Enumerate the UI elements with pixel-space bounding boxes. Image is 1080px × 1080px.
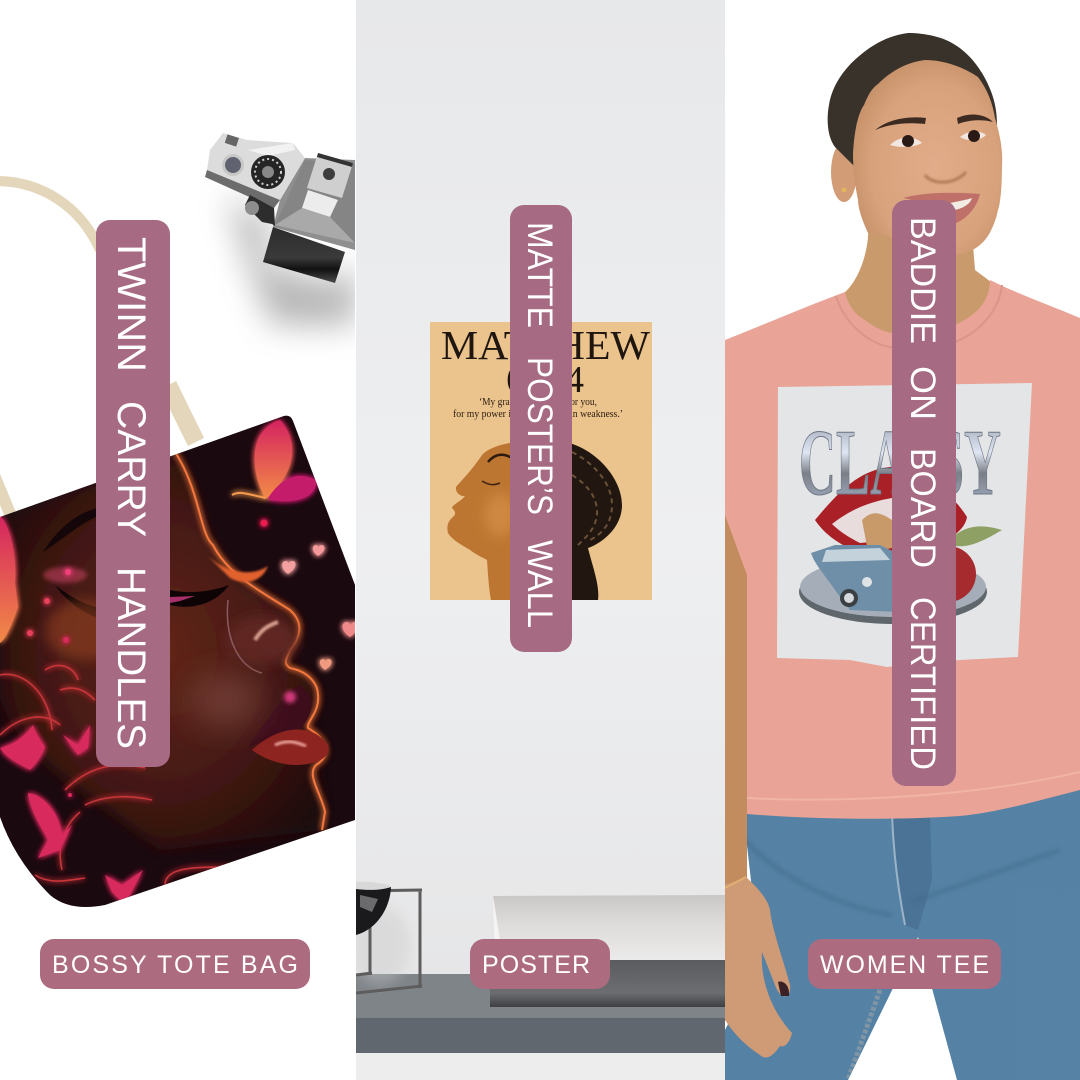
icon: camera <box>205 133 356 325</box>
mouth <box>903 193 980 226</box>
pill: baddie on board certified: BOARD <box>903 448 942 568</box>
shelf with books and decor <box>350 882 725 1080</box>
print: cherry and leaf <box>956 526 1002 601</box>
pill: baddie on board certified: ON <box>903 366 942 420</box>
brows <box>875 115 993 130</box>
print: lips <box>815 467 967 553</box>
pill: twinn carry handles: HANDLES <box>109 567 153 749</box>
hair <box>828 33 997 165</box>
pill: matte poster's wall <box>510 205 572 652</box>
poster artwork <box>430 322 652 600</box>
label: poster: POSTER <box>482 951 590 979</box>
tote bag artwork <box>0 410 358 920</box>
ear <box>831 148 856 202</box>
poster: quote <box>453 397 623 420</box>
poster: quote: ‘My grace is sufficient for you, <box>479 397 597 408</box>
pill: baddie on board certified: CERTIFIED <box>903 597 942 770</box>
tote: left butterfly and sparkles <box>0 515 358 670</box>
pill: twinn carry handles <box>96 220 170 767</box>
panel: tote bag <box>0 133 355 907</box>
label: women tee <box>808 939 1001 989</box>
tote: swirl vines <box>0 665 240 885</box>
pill: matte poster's wall: WALL <box>520 540 559 628</box>
tee print <box>777 383 1032 667</box>
pill: baddie on board certified <box>892 200 956 786</box>
tote: eyebrow and eye <box>43 508 268 660</box>
pill: matte poster's wall: MATTE <box>520 222 559 328</box>
print: classic car <box>811 545 892 612</box>
pill: baddie on board certified: BADDIE <box>903 217 942 344</box>
model head <box>828 33 1002 255</box>
pink t-shirt <box>725 280 1080 819</box>
earring <box>842 188 846 192</box>
tote: neon contour <box>175 452 326 830</box>
label: women tee: WOMEN TEE <box>820 951 989 979</box>
neck <box>845 233 990 333</box>
tote: small butterflies <box>0 637 143 902</box>
icon: tote handles <box>0 181 196 516</box>
metal frame and bowl <box>350 882 422 993</box>
panel: poster on wall <box>350 0 725 1080</box>
label: bossy tote bag <box>40 939 310 989</box>
nose <box>925 172 966 182</box>
pill: matte poster's wall: POSTER’S <box>520 357 559 515</box>
jeans <box>725 785 1080 1080</box>
arm and hand <box>725 500 792 1058</box>
tote: top butterfly <box>232 420 316 501</box>
print: platform <box>799 568 987 624</box>
poster: title: MATTHEW <box>441 322 650 368</box>
tote: face skin <box>0 452 326 850</box>
poster: verse number: 6:14 <box>506 359 584 401</box>
label: poster <box>470 939 610 989</box>
face <box>853 60 1002 255</box>
panel: women tee model <box>725 0 1080 1080</box>
pill: twinn carry handles: TWINN <box>109 237 153 372</box>
pill: twinn carry handles: CARRY <box>109 401 153 537</box>
books <box>490 895 725 1007</box>
eyes <box>890 130 986 147</box>
poster: quote: for my power is made perfect in weakness.’ <box>453 409 623 420</box>
poster: profile portrait <box>447 441 622 600</box>
label: bossy tote bag: BOSSY TOTE BAG <box>52 951 298 979</box>
tote: nose and lips <box>189 600 329 765</box>
